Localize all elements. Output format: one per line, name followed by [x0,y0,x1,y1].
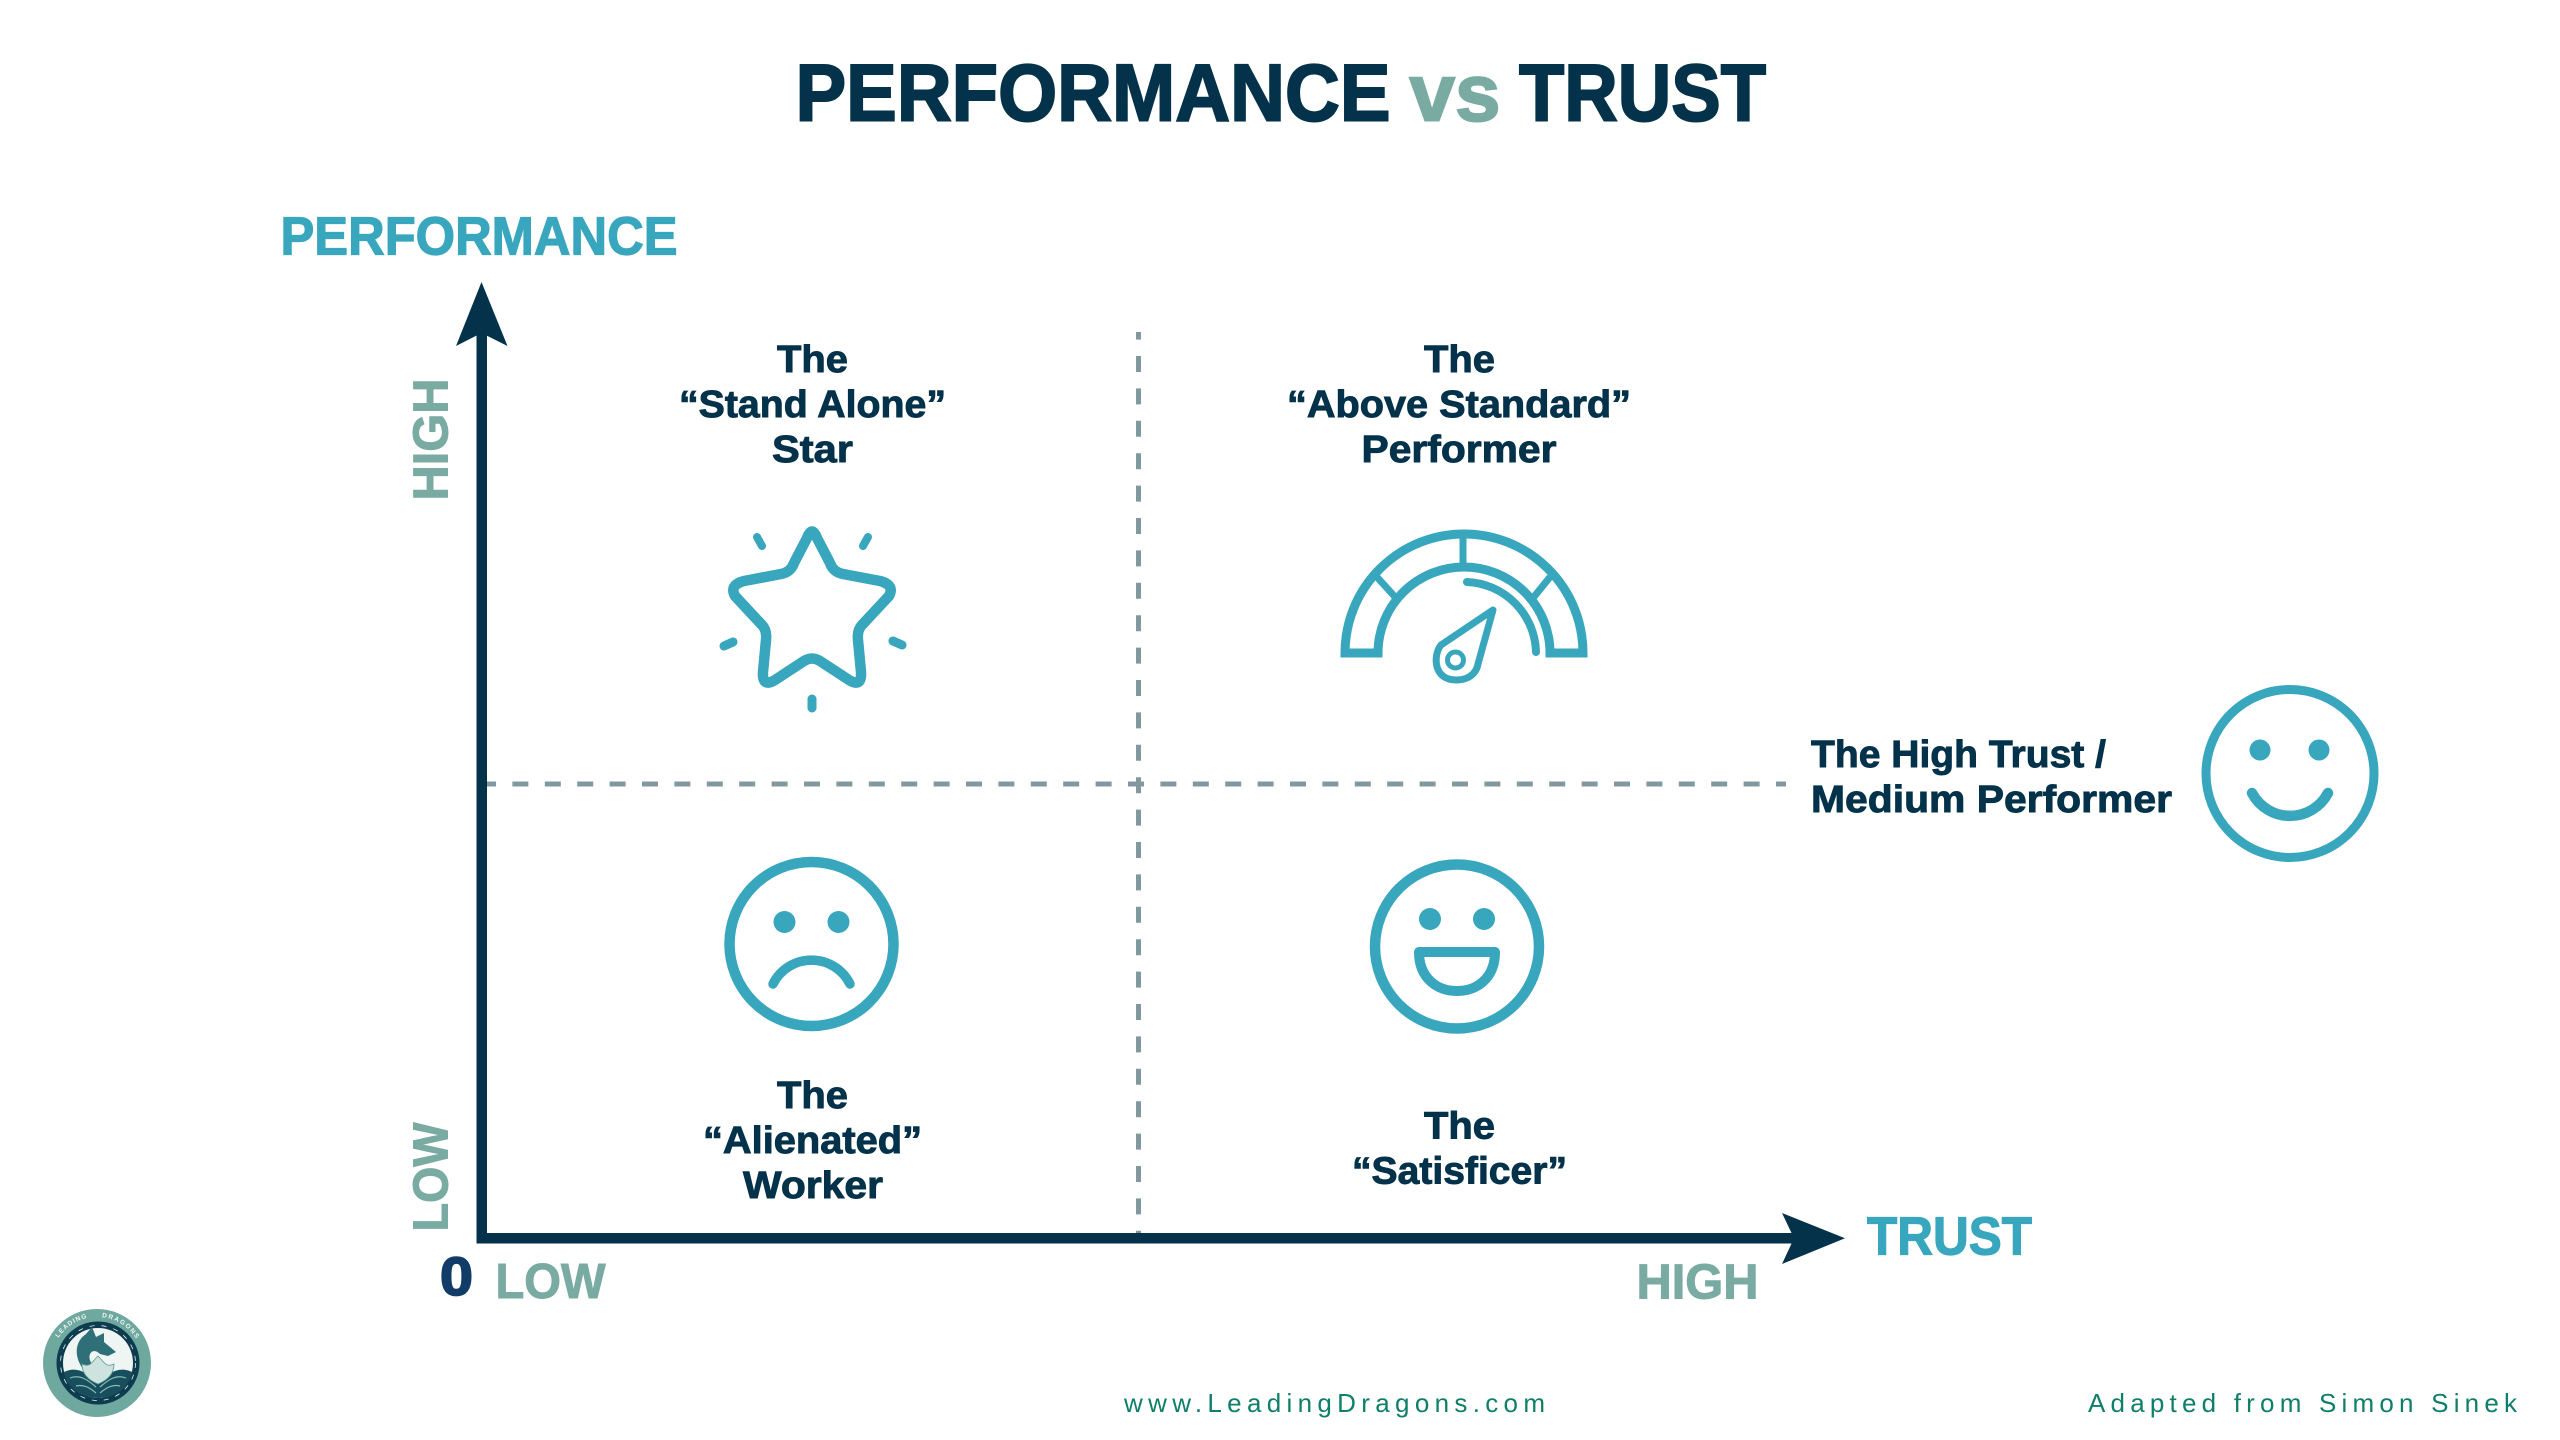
quadrant divider: vertical dashed line [1136,332,1141,1234]
icon: grinning face [1375,864,1539,1028]
logo: lotus flower [82,1356,114,1384]
logo: word leading: LEADING [55,1314,86,1338]
heading: above standard performer: The [1424,339,1495,381]
heading: above standard performer: “Above Standard” [1287,384,1631,426]
quadrant divider: horizontal dashed line [480,782,1786,786]
x axis label: trust: TRUST [1867,1206,2032,1266]
y axis arrow [456,282,508,1243]
heading: alienated worker: Worker [743,1165,883,1207]
heading: stand alone star [679,339,946,471]
x axis arrow [476,1213,1845,1264]
heading: above standard performer [1287,339,1631,471]
heading: alienated worker: The [777,1075,848,1117]
heading: satisficer [1352,1106,1567,1192]
heading: alienated worker: “Alienated” [703,1120,922,1162]
footer: attribution: Adapted from Simon Sinek [2088,1388,2518,1418]
logo: lettering arc [51,1317,143,1363]
footer: website: www.LeadingDragons.com [1123,1388,1545,1418]
heading: high trust medium performer [1811,734,2172,821]
title: TRUST [1519,48,1766,138]
logo: dragon [77,1327,116,1370]
icon: star [724,532,902,708]
logo: leading dragons badge [43,1309,151,1417]
logo: word dragons: DRAGONS [102,1312,140,1338]
x axis high label: HIGH [1636,1256,1758,1310]
heading: high trust medium performer: Medium Performer [1811,779,2172,821]
y axis high label: HIGH [404,378,458,500]
heading: high trust medium performer: The High Trust / [1811,734,2106,776]
title: PERFORMANCE [796,48,1390,138]
heading: stand alone star: “Stand Alone” [679,384,946,426]
x axis low label: LOW [496,1255,606,1309]
icon: smiling face [2206,690,2374,858]
title: vs [1410,48,1500,138]
icon: speedometer gauge [1345,534,1583,680]
heading: satisficer: The [1424,1106,1495,1148]
heading: above standard performer: Performer [1362,429,1557,471]
y axis low label: LOW [404,1122,458,1232]
logo: wave highlights [70,1377,126,1393]
heading: stand alone star: The [777,339,848,381]
heading: satisficer: “Satisficer” [1352,1150,1567,1192]
origin zero: 0 [440,1247,473,1307]
icon: sad face [730,862,894,1026]
logo: waves [64,1370,132,1398]
title [796,48,1766,138]
heading: stand alone star: Star [772,429,853,471]
y axis label: performance: PERFORMANCE [280,206,678,266]
heading: alienated worker [703,1075,922,1207]
